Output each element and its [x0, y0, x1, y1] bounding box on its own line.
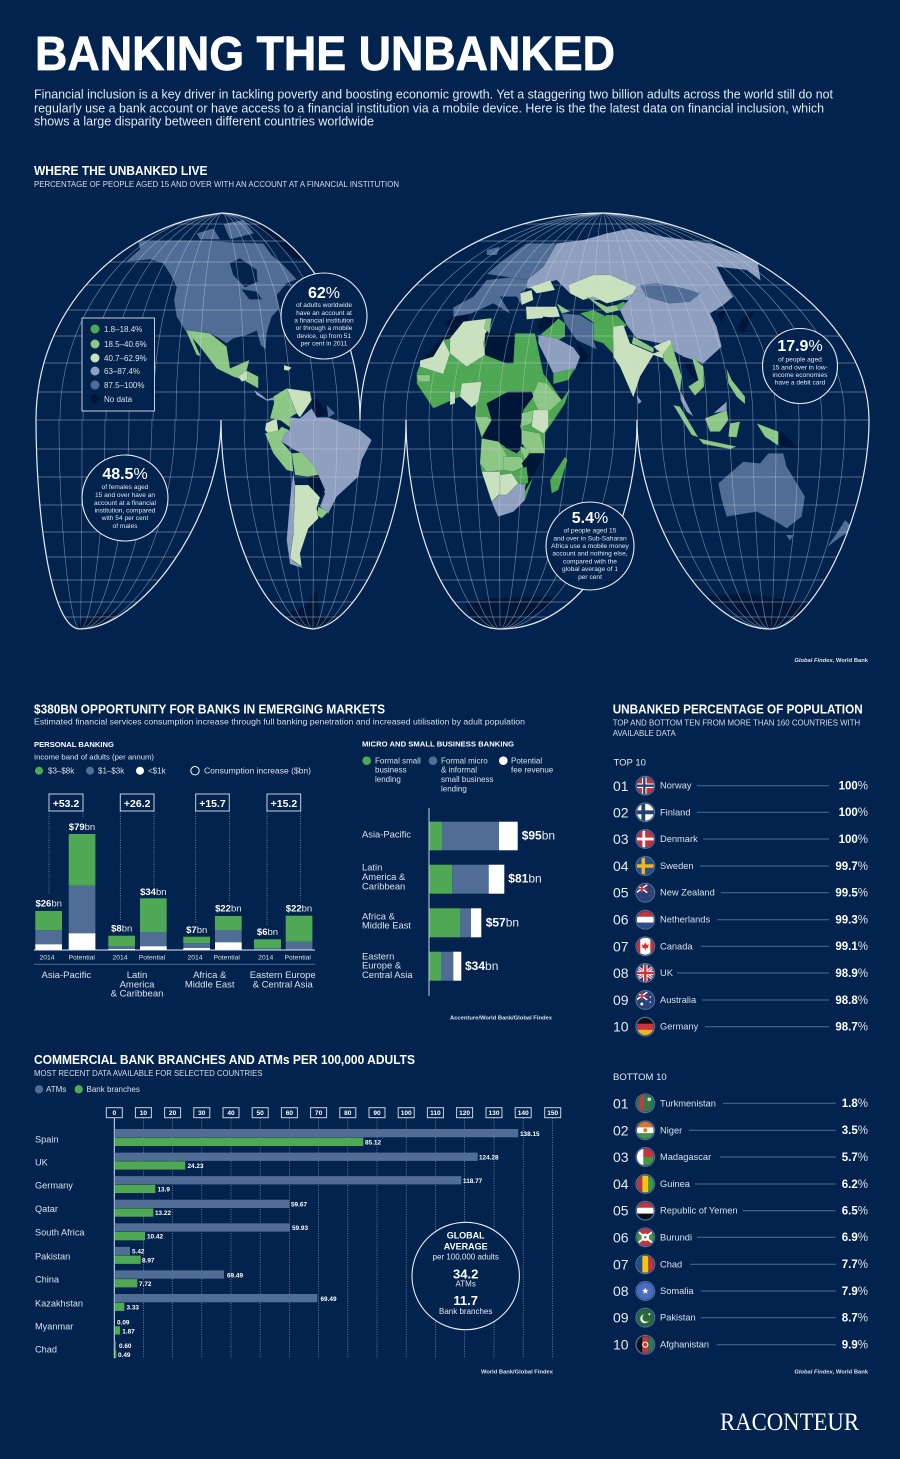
- top 10 label: TOP 10: [614, 757, 646, 768]
- axis labels: Potential: [139, 954, 166, 961]
- callout: 62%: of adults worldwide: [296, 302, 352, 309]
- axis scale: 120: [459, 1110, 470, 1117]
- icon: flag Guinea: [636, 1175, 655, 1193]
- row: Sweden: Sweden: [660, 861, 694, 871]
- personal banking heading and legend: PERSONAL BANKING: [34, 740, 114, 749]
- callout: 62%: device, up from 51: [297, 333, 351, 340]
- row: Burundi: Burundi: [660, 1232, 692, 1242]
- row: Canada: 99.1%: [835, 941, 868, 953]
- icon: flag Somalia: [636, 1282, 655, 1300]
- callout: 5.4%: per cent: [578, 574, 602, 581]
- map legend: 18.5–40.6%: [104, 340, 147, 349]
- row: Denmark: 03: [613, 831, 629, 847]
- row: Burundi: [613, 1228, 868, 1247]
- row: Germany: [613, 1017, 868, 1036]
- intro text: regularly use a bank account or have access to a financial institution via a mobile device. Here is the the latest data on financial inclusion, which: [34, 100, 824, 115]
- row: Guinea: 6.2%: [842, 1179, 868, 1191]
- icon: flag Chad: [636, 1255, 655, 1274]
- bar value labels: 13.22: [155, 1210, 171, 1217]
- personal banking heading and legend: Consumption increase ($bn): [204, 766, 311, 776]
- row: Pakistan: Pakistan: [660, 1313, 696, 1323]
- row: Australia: 09: [613, 992, 629, 1008]
- country labels: [35, 1134, 85, 1355]
- row: Norway: Norway: [660, 781, 692, 791]
- panel: unbanked percentage of population: [613, 702, 869, 1376]
- bar value labels: 7.72: [139, 1281, 152, 1288]
- callout: global average: 11.7: [453, 1293, 478, 1308]
- bar value labels: $22bn: [215, 904, 242, 915]
- axis scale: 90: [373, 1110, 381, 1117]
- map outline: [36, 213, 869, 629]
- country labels: Myanmar: [35, 1322, 73, 1332]
- map legend: 87.5–100%: [104, 381, 144, 390]
- callout: 5.4%: compared with the: [563, 558, 617, 566]
- icon: flag Sweden: [636, 857, 655, 875]
- row: Canada: 07: [613, 938, 629, 954]
- region labels: Africa &: [362, 910, 396, 921]
- icon: flag UK: [636, 964, 655, 982]
- row: Afghanistan: 9.9%: [842, 1340, 868, 1352]
- heading: UNBANKED PERCENTAGE OF POPULATION: [613, 702, 863, 716]
- callout: 5.4%: 5.4%: [572, 510, 608, 527]
- axis labels: Eastern Europe: [250, 970, 316, 981]
- personal banking heading and legend: $1–$3k: [98, 766, 125, 776]
- personal banking heading and legend: $3–$8k: [48, 766, 75, 776]
- row: Niger: 02: [613, 1122, 629, 1138]
- row: Sweden: 99.7%: [835, 861, 868, 873]
- bar value labels: 69.49: [227, 1272, 243, 1279]
- row: Niger: Niger: [660, 1125, 682, 1135]
- heading: $380bn opportunity: [34, 702, 525, 726]
- heading: $380bn opportunity: $380BN OPPORTUNITY FOR BANKS IN EMERGING MARKETS: [34, 702, 385, 716]
- row: Somalia: 08: [613, 1283, 629, 1299]
- row: Denmark: Denmark: [660, 834, 698, 844]
- row: Turkmenistan: 1.8%: [842, 1098, 868, 1110]
- micro banking heading and legend: business: [375, 766, 407, 774]
- callout: 5.4%: [546, 502, 634, 590]
- intro text: Financial inclusion is a key driver in tackling poverty and boosting economic growth. Yet a staggering two billion adults across the world still do not: [34, 86, 833, 102]
- callout: 62%: [281, 273, 367, 359]
- callout: global average: per 100,000 adults: [433, 1252, 499, 1261]
- micro banking heading and legend: [362, 740, 554, 793]
- axis scale: 70: [315, 1110, 323, 1117]
- bar value labels: 3.33: [126, 1304, 139, 1312]
- map land: americas and antarctica west: [75, 220, 372, 630]
- icon: flag Madagascar: [636, 1148, 655, 1166]
- country labels: Qatar: [35, 1204, 58, 1214]
- row: Turkmenistan: 01: [613, 1095, 629, 1111]
- row: Norway: 100%: [839, 780, 868, 792]
- chart legend: Bank branches: [86, 1085, 140, 1094]
- row: Republic of Yemen: 6.5%: [842, 1206, 868, 1218]
- callout: 48.5%: account at a financial: [94, 500, 157, 507]
- axis labels: & Caribbean: [111, 989, 163, 1000]
- bar value labels: $34bn: [140, 887, 167, 898]
- micro banking heading and legend: lending: [441, 784, 467, 793]
- callout: 62%: or through a mobile: [296, 325, 353, 332]
- bar value labels: [35, 822, 312, 938]
- bar value labels: 0.09: [117, 1320, 130, 1327]
- panel: commercial bank branches and ATMs: [34, 1053, 561, 1376]
- icon: flag Turkmenistan: [636, 1094, 655, 1113]
- map legend: No data: [104, 395, 133, 404]
- axis labels: [39, 954, 316, 1000]
- map legend: 63–87.4%: [104, 367, 140, 376]
- country labels: Pakistan: [35, 1251, 70, 1261]
- axis labels: Middle East: [185, 980, 235, 991]
- row: New Zealand: [613, 883, 868, 902]
- region labels: Caribbean: [362, 880, 405, 891]
- row: Burundi: 6.9%: [842, 1232, 868, 1244]
- title: BANKING THE UNBANKED: [35, 28, 615, 81]
- row: Somalia: [613, 1282, 868, 1300]
- callout: 5.4%: global average of 1: [562, 566, 618, 573]
- row: Pakistan: 09: [613, 1310, 629, 1326]
- heading: [34, 1053, 415, 1078]
- row: Finland: 100%: [839, 807, 868, 819]
- callout: 5.4%: and over in Sub-Saharan: [553, 536, 627, 542]
- micro banking heading and legend: fee revenue: [511, 766, 554, 774]
- bar value labels: 0.60: [119, 1343, 132, 1350]
- bar value labels: 138.15: [520, 1131, 540, 1138]
- icon: flag Pakistan: [636, 1308, 655, 1327]
- row: Republic of Yemen: Republic of Yemen: [660, 1206, 738, 1216]
- icon: flag Norway: [636, 776, 655, 795]
- row: Norway: 01: [613, 778, 629, 794]
- callout: 48.5%: institution, compared: [95, 508, 156, 514]
- map legend: [82, 318, 154, 411]
- row: Turkmenistan: Turkmenistan: [660, 1098, 716, 1108]
- callout: 5.4%: of people aged 15: [564, 528, 617, 534]
- horizontal stacked bars: [429, 808, 518, 996]
- row: Canada: Canada: [660, 941, 693, 951]
- increase boxes and leader lines: [49, 794, 301, 925]
- row: Chad: Chad: [660, 1259, 682, 1269]
- axis labels: 2014: [112, 954, 128, 961]
- heading: where the unbanked live: WHERE THE UNBANKED LIVE: [34, 164, 208, 178]
- bar totals: $57bn: [486, 916, 519, 930]
- row: Guinea: Guinea: [660, 1179, 691, 1189]
- bar value labels: 85.12: [365, 1140, 381, 1146]
- region labels: America &: [362, 871, 406, 882]
- row: Australia: [613, 991, 868, 1009]
- axis scale: 10: [140, 1110, 147, 1117]
- callout: 62%: per cent in 2011: [301, 340, 348, 348]
- row: Sweden: [613, 857, 868, 875]
- row: Madagascar: [613, 1148, 868, 1166]
- bar value labels: [117, 1131, 540, 1359]
- row: Burundi: 06: [613, 1229, 629, 1245]
- row: Niger: [613, 1121, 868, 1140]
- row: Madagascar: Madagascar: [660, 1152, 711, 1162]
- bar value labels: 8.97: [142, 1257, 155, 1264]
- bar totals: $95bn: [522, 828, 555, 842]
- callout: 48.5%: of males: [113, 523, 138, 530]
- region labels: Central Asia: [362, 969, 413, 980]
- callout: 17.9%: [762, 328, 838, 404]
- axis labels: Africa &: [193, 970, 227, 981]
- callout: 62%: have an account at: [296, 310, 352, 317]
- row: Republic of Yemen: 05: [613, 1203, 629, 1219]
- axis scale: 80: [344, 1110, 352, 1117]
- ATM and branch bars: [114, 1129, 518, 1358]
- axis scale: 50: [257, 1110, 264, 1117]
- axis scale: 40: [227, 1110, 235, 1117]
- axis labels: Latin: [127, 970, 147, 981]
- row: New Zealand: 99.5%: [835, 888, 868, 900]
- intro text: shows a large disparity between different countries worldwide: [34, 114, 374, 129]
- row: Australia: Australia: [660, 995, 697, 1005]
- bar value labels: 59.93: [292, 1225, 308, 1232]
- increase boxes and leader lines: +53.2: [53, 798, 79, 810]
- bar totals: $81bn: [508, 871, 542, 885]
- row: New Zealand: 05: [613, 885, 629, 901]
- bar value labels: 118.77: [463, 1178, 483, 1185]
- icon: flag Germany: [636, 1017, 655, 1036]
- heading: where the unbanked live: [34, 164, 399, 189]
- callout: 62%: 62%: [308, 285, 340, 302]
- source: World Bank/Global Findex: [481, 1370, 554, 1376]
- axis labels: Potential: [284, 954, 311, 961]
- row: Madagascar: 5.7%: [842, 1152, 868, 1164]
- map legend: 40.7–62.9%: [104, 354, 147, 363]
- graticule: [30, 213, 875, 629]
- axis scale: 20: [169, 1110, 177, 1117]
- row: Pakistan: 8.7%: [842, 1312, 868, 1324]
- icon: flag Finland: [636, 803, 655, 822]
- axis labels: America: [120, 980, 155, 991]
- source: Global Findex, World Bank: [794, 1370, 869, 1376]
- callout: 48.5%: 48.5%: [102, 466, 148, 483]
- row: Chad: [613, 1255, 868, 1274]
- row: Turkmenistan: [613, 1094, 868, 1113]
- region labels: [362, 828, 413, 980]
- row: Netherlands: Netherlands: [660, 915, 710, 925]
- icon: flag Yemen: [636, 1201, 655, 1220]
- row: Finland: [613, 803, 868, 822]
- region labels: Asia-Pacific: [362, 828, 411, 839]
- country labels: Spain: [35, 1134, 58, 1144]
- bar value labels: $79bn: [69, 822, 95, 833]
- heading: AVAILABLE DATA: [613, 729, 676, 738]
- icon: flag New Zealand: [636, 883, 655, 902]
- bottom 10 label: BOTTOM 10: [613, 1072, 667, 1083]
- stacked bars: [34, 834, 315, 964]
- row: Chad: 7.7%: [842, 1259, 868, 1271]
- region labels: Eastern: [362, 950, 394, 961]
- row: Afghanistan: Afghanistan: [660, 1340, 709, 1350]
- axis scale: 130: [488, 1110, 500, 1117]
- region labels: Europe &: [362, 960, 402, 971]
- callout: global average: Bank branches: [439, 1307, 492, 1316]
- micro banking heading and legend: small business: [441, 775, 493, 784]
- axis labels: & Central Asia: [253, 980, 314, 991]
- bar value labels: 59.67: [291, 1202, 307, 1208]
- world map: [30, 213, 875, 630]
- map land: europe, africa, asia, oceania: [417, 228, 854, 629]
- callout: 48.5%: [82, 455, 168, 541]
- country labels: UK: [35, 1157, 49, 1167]
- callout: 17.9%: 17.9%: [777, 338, 823, 355]
- bar value labels: $22bn: [286, 904, 312, 915]
- bar value labels: $26bn: [35, 899, 62, 910]
- bar value labels: 10.42: [147, 1234, 163, 1241]
- row: Guinea: 04: [613, 1176, 629, 1192]
- bar value labels: 0.49: [118, 1352, 131, 1359]
- callout: 62%: a financial institution: [294, 318, 354, 324]
- row: Canada: [613, 937, 868, 956]
- row: UK: 98.9%: [835, 968, 868, 980]
- personal banking heading and legend: Income band of adults (per annum): [34, 752, 155, 761]
- icon: flag Netherlands: [636, 910, 655, 929]
- icon: flag Afghanistan: [636, 1335, 655, 1354]
- bar value labels: 5.42: [132, 1249, 145, 1256]
- bar totals: [465, 828, 555, 973]
- row: Pakistan: [613, 1308, 868, 1327]
- country labels: Chad: [35, 1345, 57, 1355]
- row: Germany: 98.7%: [835, 1022, 868, 1034]
- country labels: Kazakhstan: [35, 1298, 83, 1308]
- axis labels: 2014: [258, 954, 273, 961]
- row: Finland: Finland: [660, 807, 690, 817]
- axis labels: Potential: [68, 954, 95, 961]
- axis scale: 100: [401, 1110, 412, 1117]
- callout: 17.9%: have a debit card: [775, 380, 826, 386]
- callout: 17.9%: of people aged: [778, 356, 822, 364]
- row: Netherlands: 99.3%: [835, 914, 868, 926]
- row: UK: 08: [613, 965, 629, 981]
- bar value labels: 24.23: [188, 1163, 204, 1170]
- region labels: Middle East: [362, 919, 411, 930]
- chart legend: ATMs: [46, 1085, 66, 1094]
- country labels: Germany: [35, 1181, 73, 1191]
- row: Denmark: 100%: [839, 834, 868, 846]
- row: Afghanistan: 10: [613, 1337, 629, 1353]
- map source: Global Findex, World Bank: [794, 658, 869, 664]
- callout: 17.9%: income economies: [773, 372, 828, 379]
- axis scale: 150: [547, 1110, 559, 1117]
- axis scale: 60: [286, 1110, 293, 1117]
- increase boxes and leader lines: +15.2: [271, 798, 297, 810]
- callout: 48.5%: of females aged: [102, 484, 149, 491]
- callout: global average: AVERAGE: [444, 1241, 488, 1251]
- source: Accenture/World Bank/Global Findex: [450, 1015, 553, 1021]
- icon: flag Australia: [636, 991, 655, 1009]
- callout: 5.4%: Africa use a mobile money: [551, 543, 630, 550]
- row: Netherlands: [613, 910, 868, 929]
- axis labels: Potential: [213, 954, 240, 961]
- panel: micro and small business banking: [362, 740, 555, 1021]
- axis scale: 140: [518, 1110, 529, 1117]
- row: Republic of Yemen: [613, 1201, 868, 1220]
- panel: personal banking: [34, 740, 316, 1000]
- row: Australia: 98.8%: [835, 995, 868, 1007]
- micro banking heading and legend: Formal micro: [441, 756, 488, 765]
- region labels: Latin: [362, 862, 382, 873]
- axis scale: 0: [112, 1110, 116, 1117]
- personal banking heading and legend: <$1k: [148, 766, 167, 776]
- bar value labels: 69.49: [320, 1296, 337, 1303]
- increase boxes and leader lines: +15.7: [199, 798, 226, 810]
- micro banking heading and legend: Potential: [511, 756, 542, 765]
- logo: RACONTEUR: [720, 1409, 859, 1436]
- icon: flag Canada: [636, 937, 655, 956]
- heading: COMMERCIAL BANK BRANCHES AND ATMs PER 100,000 ADULTS: [34, 1053, 415, 1067]
- row: Somalia: 7.9%: [842, 1286, 868, 1298]
- row: Chad: 07: [613, 1256, 629, 1272]
- callout: global average: GLOBAL: [447, 1230, 485, 1240]
- axis labels: Asia-Pacific: [41, 970, 91, 981]
- bar value labels: 1.87: [122, 1328, 135, 1335]
- row: Sweden: 04: [613, 858, 629, 874]
- bar value labels: $8bn: [111, 924, 132, 935]
- callout: 48.5%: 15 and over have an: [95, 492, 155, 499]
- axis labels: 2014: [39, 954, 55, 961]
- micro banking heading and legend: Formal small: [375, 756, 421, 765]
- row: Guinea: [613, 1175, 868, 1193]
- micro banking heading and legend: & informal: [441, 766, 477, 774]
- callout: 17.9%: 15 and over in low-: [772, 364, 828, 372]
- heading: [613, 702, 863, 738]
- row: Germany: 10: [613, 1019, 629, 1035]
- map legend: 1.8–18.4%: [104, 325, 142, 334]
- bar value labels: 124.28: [479, 1154, 499, 1162]
- increase boxes and leader lines: +26.2: [124, 798, 151, 810]
- row: Germany: Germany: [660, 1022, 699, 1032]
- axis labels: 2014: [187, 954, 203, 961]
- axis scale: 30: [198, 1110, 206, 1117]
- intro text: [34, 86, 833, 129]
- callout: global average: [412, 1222, 519, 1330]
- icon: flag Denmark: [636, 830, 655, 848]
- chart legend: [35, 1085, 140, 1094]
- heading: $380bn opportunity: Estimated financial services consumption increase through full banking penetration and increased utilisation by adult population: [34, 717, 525, 726]
- bar totals: $34bn: [465, 959, 498, 973]
- row: Niger: 3.5%: [842, 1125, 868, 1137]
- country labels: China: [35, 1275, 60, 1285]
- bar value labels: $6bn: [257, 927, 278, 938]
- row: Somalia: Somalia: [660, 1286, 694, 1296]
- row: Finland: 02: [613, 804, 629, 820]
- callout: global average: ATMs: [456, 1280, 476, 1289]
- country labels: South Africa: [35, 1228, 85, 1238]
- micro banking heading and legend: lending: [375, 775, 401, 784]
- icon: flag Burundi: [636, 1228, 655, 1247]
- heading: where the unbanked live: PERCENTAGE OF PEOPLE AGED 15 AND OVER WITH AN ACCOUNT AT A FINANCIAL INSTITUTION: [34, 180, 399, 189]
- row: Netherlands: 06: [613, 912, 629, 928]
- callout: 5.4%: account and nothing else,: [552, 550, 628, 558]
- micro banking heading and legend: MICRO AND SMALL BUSINESS BANKING: [362, 740, 514, 749]
- personal banking heading and legend: [34, 740, 311, 776]
- bar value labels: $7bn: [186, 925, 207, 936]
- row: Denmark: [613, 830, 868, 848]
- icon: flag Niger: [636, 1121, 655, 1140]
- row: Afghanistan: [613, 1335, 868, 1354]
- callout: global average: 34.2: [453, 1266, 478, 1281]
- row: Norway: [613, 776, 868, 795]
- heading: MOST RECENT DATA AVAILABLE FOR SELECTED COUNTRIES: [34, 1069, 262, 1078]
- axis scale: 110: [430, 1110, 441, 1117]
- row: UK: [613, 964, 868, 982]
- callout: 48.5%: with 54 per cent: [101, 515, 148, 522]
- heading: TOP AND BOTTOM TEN FROM MORE THAN 160 COUNTRIES WITH: [613, 719, 860, 728]
- axis scale: [106, 1108, 561, 1358]
- row: New Zealand: New Zealand: [660, 888, 715, 898]
- row: Madagascar: 03: [613, 1149, 629, 1165]
- row: UK: UK: [660, 968, 674, 978]
- bar value labels: 13.9: [158, 1186, 170, 1194]
